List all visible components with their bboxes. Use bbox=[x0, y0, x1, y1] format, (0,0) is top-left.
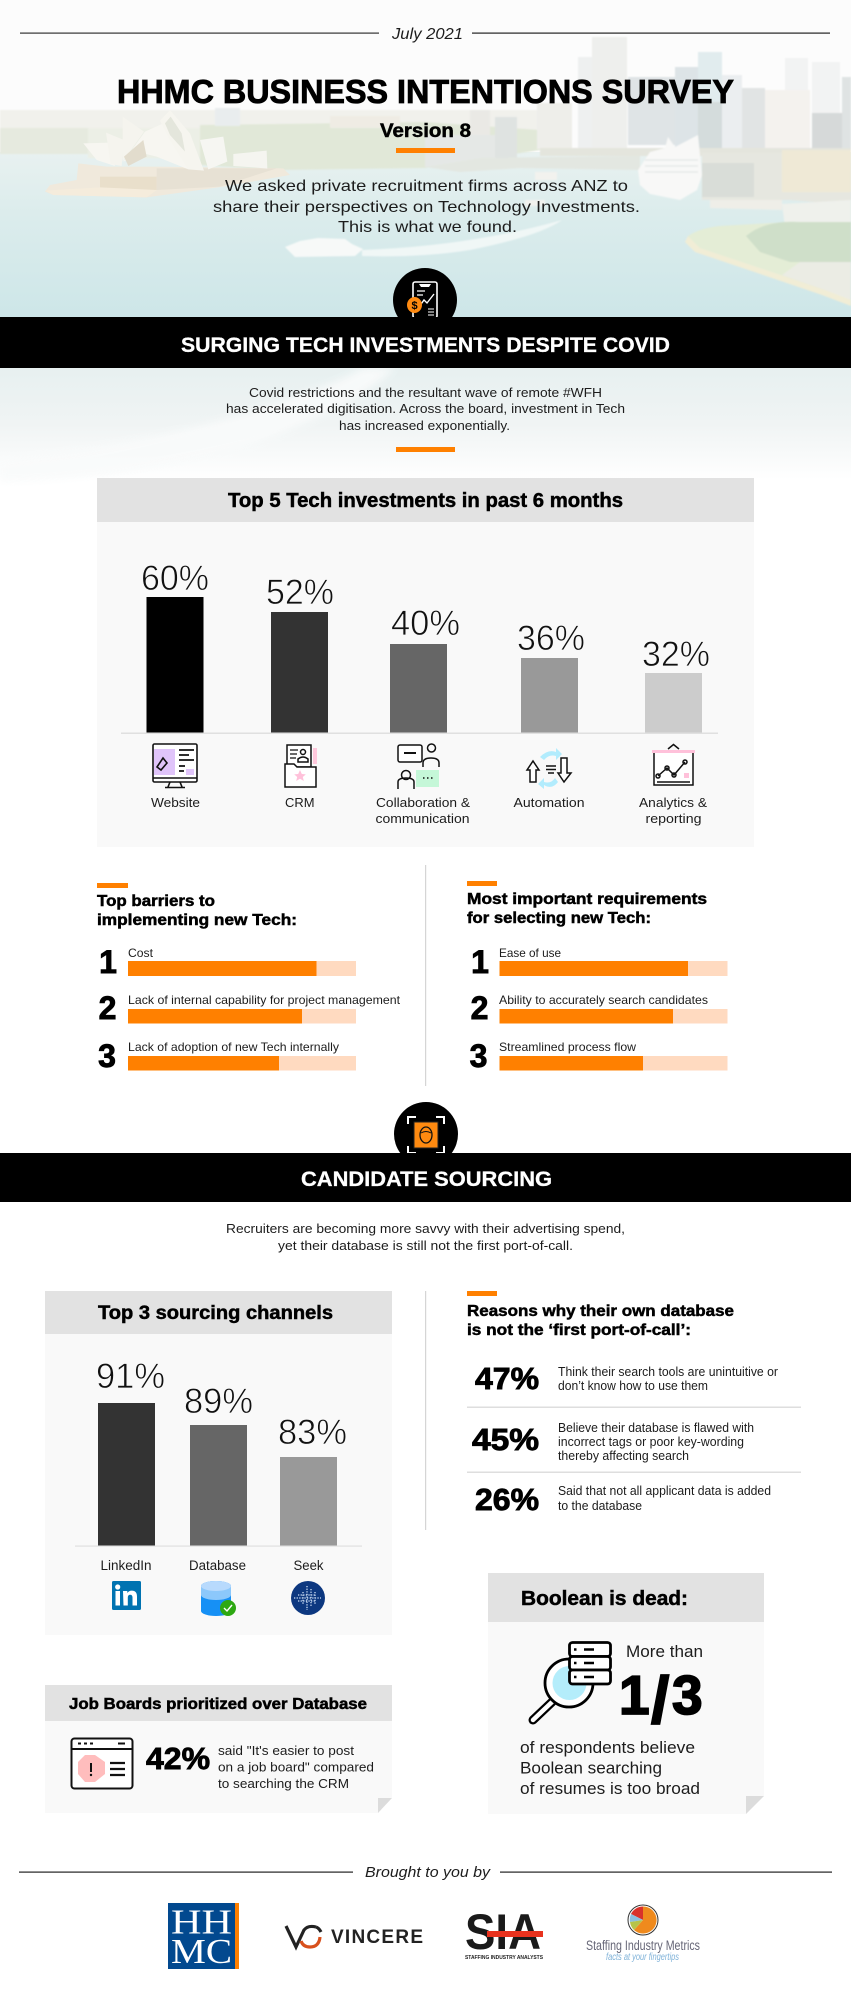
bar labels: Ability to accurately search candidates bbox=[499, 993, 708, 1007]
stat 26% bbox=[475, 1482, 771, 1517]
date header: July 2021 bbox=[391, 26, 463, 43]
icon: analytics bbox=[652, 744, 695, 785]
body text: Boolean searching bbox=[520, 1760, 662, 1778]
footer heading: Brought to you by bbox=[365, 1864, 492, 1881]
stat: more than 1/3: 1 bbox=[619, 1664, 650, 1726]
bar chart: 32% bbox=[642, 635, 710, 674]
section intro text: Covid restrictions and the resultant wave of remote #WFH bbox=[249, 385, 602, 400]
body text: of resumes is too broad bbox=[520, 1780, 700, 1798]
waterfront buildings bbox=[702, 150, 851, 227]
logo: HHMC bbox=[168, 1902, 239, 1971]
stat 26%: to the database bbox=[558, 1499, 642, 1513]
section intro text: has increased exponentially. bbox=[339, 418, 510, 433]
intro text bbox=[213, 178, 640, 236]
banner: candidate sourcing bbox=[0, 1153, 851, 1202]
bar chart: 60% bbox=[141, 559, 209, 598]
panel: top 3 sourcing channels bbox=[45, 1291, 392, 1635]
vertical divider bbox=[425, 865, 426, 1086]
stat 47%: don’t know how to use them bbox=[558, 1379, 708, 1393]
stat: more than 1/3 bbox=[619, 1642, 703, 1737]
icon: LinkedIn bbox=[112, 1581, 141, 1610]
channel labels: LinkedIn bbox=[100, 1558, 152, 1573]
bar chart: 83% bbox=[278, 1413, 347, 1452]
progress bars bbox=[128, 961, 356, 1070]
panel: boolean is dead bbox=[488, 1573, 764, 1814]
stat: more than 1/3: More than bbox=[626, 1642, 703, 1661]
section intro text: yet their database is still not the first port-of-call. bbox=[278, 1238, 573, 1253]
bar labels bbox=[128, 946, 401, 1054]
category labels: reporting bbox=[646, 811, 702, 826]
heading: is not the ‘first port-of-call’: bbox=[467, 1322, 691, 1339]
icon: automation bbox=[527, 748, 571, 789]
icon: phone with chart and dollar bbox=[393, 268, 457, 332]
stat 47%: 47% bbox=[475, 1361, 539, 1396]
section intro text bbox=[226, 385, 625, 433]
progress bars bbox=[500, 961, 728, 1070]
bar chart: 89% bbox=[184, 1382, 253, 1421]
category labels: Collaboration & bbox=[376, 795, 470, 810]
stat: more than 1/3: / bbox=[651, 1663, 669, 1737]
banner: candidate sourcing: CANDIDATE SOURCING bbox=[301, 1168, 552, 1191]
banner: surging tech investments: SURGING TECH INVESTMENTS DESPITE COVID bbox=[181, 334, 670, 357]
logo: SIA: STAFFING INDUSTRY ANALYSTS bbox=[465, 1955, 543, 1961]
panel heading: Top 3 sourcing channels bbox=[98, 1303, 333, 1324]
folded corner bbox=[746, 1796, 764, 1814]
bar labels: Ease of use bbox=[499, 946, 561, 960]
bar labels bbox=[499, 946, 708, 1054]
icon: magnifier on servers bbox=[533, 1642, 610, 1720]
background photo: Sydney harbour bbox=[0, 0, 851, 318]
icon: phone with chart and dollar: $ bbox=[411, 300, 418, 312]
stat: more than 1/3: 3 bbox=[672, 1664, 703, 1726]
body text bbox=[520, 1739, 700, 1798]
category labels: CRM bbox=[285, 795, 314, 810]
orange accent bbox=[396, 447, 455, 452]
stat description bbox=[218, 1743, 374, 1791]
stat 45%: incorrect tags or poor key-wording bbox=[558, 1435, 744, 1449]
banner: surging tech investments bbox=[0, 317, 851, 368]
logo: HHMC: MC bbox=[171, 1932, 232, 1971]
logo: Vincere: VINCERE bbox=[331, 1927, 423, 1948]
icon: database bbox=[201, 1581, 236, 1616]
panel heading: Top 5 Tech investments in past 6 months bbox=[228, 490, 623, 512]
stat description: on a job board" compared bbox=[218, 1760, 374, 1774]
logo: Staffing Industry Metrics: facts at your fingertips bbox=[606, 1952, 679, 1963]
stat 45% bbox=[472, 1421, 754, 1463]
rank numbers: 2 bbox=[99, 990, 116, 1026]
bar labels: Cost bbox=[128, 946, 154, 960]
bar chart bbox=[121, 559, 718, 734]
intro text: share their perspectives on Technology Investments. bbox=[213, 199, 640, 216]
icon: collaboration bbox=[398, 744, 439, 789]
rank numbers bbox=[98, 944, 117, 1074]
stat 42%: 42% bbox=[146, 1741, 210, 1776]
stat 47% bbox=[475, 1361, 778, 1396]
icon: website bbox=[153, 744, 197, 788]
panel heading: Boolean is dead: bbox=[521, 1588, 688, 1610]
logo: Staffing Industry Metrics: Staffing Industry Metrics bbox=[586, 1938, 700, 1953]
bar labels: Streamlined process flow bbox=[499, 1040, 636, 1054]
rank numbers: 1 bbox=[471, 944, 489, 980]
stat description: to searching the CRM bbox=[218, 1776, 349, 1791]
section intro text bbox=[226, 1221, 625, 1253]
panel: reasons why not first port of call bbox=[467, 1291, 801, 1517]
category labels: communication bbox=[376, 811, 470, 826]
rank numbers: 2 bbox=[471, 990, 488, 1026]
logo: SIA: SIA bbox=[465, 1904, 541, 1960]
category labels: Automation bbox=[514, 795, 584, 810]
heading bbox=[467, 1303, 734, 1339]
subtitle: version: Version 8 bbox=[380, 121, 471, 142]
category labels bbox=[151, 795, 707, 826]
title: HHMC BUSINESS INTENTIONS SURVEY bbox=[117, 73, 734, 110]
logo: Vincere bbox=[286, 1926, 423, 1948]
cruise ship bbox=[638, 135, 702, 200]
panel: job boards prioritized bbox=[45, 1685, 392, 1813]
channel labels bbox=[100, 1558, 324, 1573]
channel labels: Database bbox=[189, 1558, 246, 1573]
section intro text: has accelerated digitisation. Across the board, investment in Tech bbox=[226, 401, 625, 416]
vertical divider bbox=[425, 1291, 426, 1530]
opera house bbox=[45, 110, 290, 197]
heading: Reasons why their own database bbox=[467, 1303, 734, 1320]
icon: browser alert bbox=[72, 1738, 132, 1788]
panel heading: Job Boards prioritized over Database bbox=[69, 1696, 367, 1713]
intro text: We asked private recruitment firms across ANZ to bbox=[225, 178, 628, 195]
heading: for selecting new Tech: bbox=[467, 910, 651, 927]
bar chart: 36% bbox=[517, 619, 585, 658]
body text: of respondents believe bbox=[520, 1739, 695, 1757]
bar chart: 52% bbox=[266, 573, 334, 612]
category labels: Website bbox=[151, 795, 200, 810]
peninsula bbox=[688, 222, 851, 300]
bar labels: Lack of internal capability for project management bbox=[128, 993, 401, 1007]
stat description: said "It's easier to post bbox=[218, 1743, 354, 1758]
background photo: faded water below banner bbox=[0, 368, 851, 482]
bar chart: 91% bbox=[96, 1357, 165, 1396]
rank numbers: 3 bbox=[470, 1038, 487, 1074]
heading: Most important requirements bbox=[467, 891, 707, 908]
rank numbers: 1 bbox=[99, 944, 117, 980]
small boats bbox=[525, 172, 557, 206]
bar labels: Lack of adoption of new Tech internally bbox=[128, 1040, 339, 1054]
heading bbox=[467, 891, 707, 927]
stat 26%: Said that not all applicant data is added bbox=[558, 1484, 771, 1498]
heading: implementing new Tech: bbox=[97, 912, 297, 929]
heading bbox=[97, 893, 297, 929]
icon: CRM folder bbox=[285, 745, 317, 787]
intro text: This is what we found. bbox=[338, 219, 517, 236]
rank numbers: 3 bbox=[98, 1038, 116, 1074]
icon: candidate scan bbox=[394, 1102, 458, 1166]
logo: HHMC: HH bbox=[171, 1902, 232, 1942]
orange accent bbox=[396, 148, 455, 153]
section intro text: Recruiters are becoming more savvy with their advertising spend, bbox=[226, 1221, 625, 1236]
panel: top 5 tech investments bbox=[97, 478, 754, 847]
bar chart: 40% bbox=[391, 604, 460, 643]
stat 45%: 45% bbox=[472, 1422, 539, 1457]
stat 45%: thereby affecting search bbox=[558, 1449, 689, 1463]
stat 45%: Believe their database is flawed with bbox=[558, 1421, 754, 1435]
stat 47%: Think their search tools are unintuitive or bbox=[558, 1365, 778, 1379]
logo: Staffing Industry Metrics bbox=[586, 1905, 700, 1963]
folded corner bbox=[378, 1798, 392, 1813]
rank numbers bbox=[470, 944, 489, 1074]
heading: Top barriers to bbox=[97, 893, 215, 910]
bar chart bbox=[75, 1357, 362, 1547]
stat 26%: 26% bbox=[475, 1482, 539, 1517]
category labels: Analytics & bbox=[639, 795, 707, 810]
channel labels: Seek bbox=[294, 1558, 324, 1573]
panel: most important requirements bbox=[467, 881, 728, 1074]
panel: top barriers bbox=[97, 883, 401, 1074]
icon: Seek bbox=[291, 1581, 325, 1615]
ferry and wake bbox=[285, 238, 363, 257]
city towers bbox=[425, 37, 851, 167]
